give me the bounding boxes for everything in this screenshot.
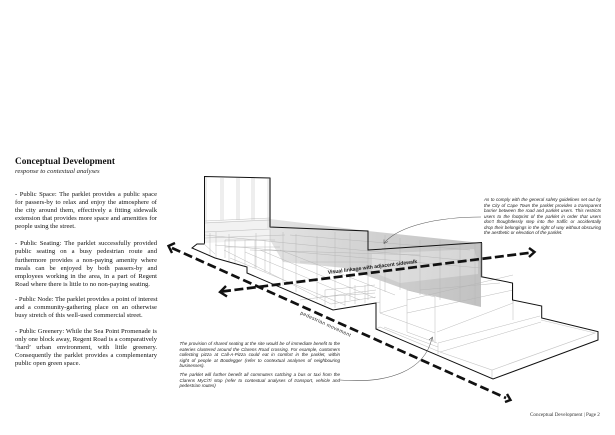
text: public node: and a community-gathering place on an otherwise <box>15 304 157 311</box>
text: public space: people using the street. <box>15 223 76 230</box>
text: public space: extension that provides more space and amenities for <box>15 215 157 222</box>
text: public node: busy stretch of this well-used commercial street. <box>15 312 143 319</box>
leader: safety note <box>384 217 481 244</box>
note: safety guidelines: barrier between the road and parklet users. This restricts <box>484 208 601 213</box>
text: public greenery: public open green space. <box>15 360 80 367</box>
thick dark wall edges <box>270 178 482 277</box>
note: shared seating: sight of people at Bootlegger (refer to contextual analyses of neighbouring <box>180 358 340 363</box>
note: safety guidelines: don’t thoughtlessly step into the traffic or accidentally <box>484 219 601 224</box>
note: commuters: The parklet will further benefit all commuters catching a bus or taxi from the <box>180 372 340 377</box>
wireframe lines <box>204 178 541 354</box>
text: public greenery <box>15 328 157 367</box>
text: public space <box>15 191 157 230</box>
note: shared seating: collecting pizza at Call-A-Pizza could eat in comfort in the parklet, within <box>180 352 340 357</box>
text: public space: the city around them, effectively a fitting sidewalk <box>15 207 157 214</box>
label: pedestrian movement: pedestrian movement <box>299 310 352 339</box>
note: shared seating <box>180 341 340 368</box>
text: public seating: meals can be enjoyed by both passers-by and <box>15 265 157 272</box>
note: safety guidelines <box>484 197 602 235</box>
arrow: pedestrian movement <box>168 243 510 402</box>
text: public space: for passers-by to relax and enjoy the atmosphere of <box>15 199 157 206</box>
note: safety guidelines: As to comply with the general safety guidelines set out by <box>484 197 601 202</box>
label: visual linkage: Visual linkage with adjacent sidewalk <box>328 259 418 276</box>
note: safety guidelines: the aesthetic or elevation of the parklet. <box>484 230 563 235</box>
note: shared seating: The provision of shared seating at the site would be of immediate benefit to the <box>180 341 340 346</box>
text: public seating: employees working in the area, in a part of Regent <box>15 273 157 280</box>
text: public seating: furthermore provides a non-paying amenity where <box>15 257 157 264</box>
note: safety guidelines: users to the footprint of the parklet in order that users <box>484 214 601 219</box>
note: shared seating: businesses). <box>180 363 205 368</box>
front platform surface <box>376 320 595 378</box>
grey back wall plane <box>205 219 481 307</box>
bold outline of parklet <box>192 176 598 379</box>
subtitle: response to contextual analyses <box>15 168 100 175</box>
footer: Conceptual Development | Page 2 <box>530 412 600 418</box>
note: safety guidelines: drop their belongings in the right of way without obscuring <box>484 225 601 230</box>
text: public greenery: ‘hard’ urban environment, with little greenery. <box>15 344 157 351</box>
title: Conceptual Development <box>15 156 115 166</box>
text: public seating: Road where there is little to no non-paying seating. <box>15 281 150 288</box>
text: public greenery: only one block away, Regent Road is a comparatively <box>15 336 157 343</box>
leader: shared seating note <box>340 337 433 381</box>
note: commuters <box>179 372 340 388</box>
note: commuters: pedestrian routes) <box>180 383 216 388</box>
text: public greenery: Consequently the parklet provides a complementary <box>15 352 157 359</box>
text: public greenery: - Public Greenery: While the Sea Point Promenade is <box>15 328 157 335</box>
text: public space: - Public Space: The parklet provides a public space <box>15 191 157 198</box>
note: commuters: Clarens MyCiTi stop (refer to contextual analyses of transport, vehicle and <box>180 378 340 383</box>
text: public seating <box>15 240 157 288</box>
arrow: visual linkage <box>220 248 534 296</box>
text: public node: - Public Node: The parklet provides a point of interest <box>15 296 158 303</box>
note: shared seating: eateries clustered around the Clarens Road crossing. For example, customers <box>180 347 340 352</box>
text: public seating: - Public Seating: The parklet successfully provided <box>15 240 157 247</box>
text: public node <box>15 296 158 319</box>
text: public seating: public seating on a busy pedestrian route and <box>15 248 157 255</box>
note: safety guidelines: the City of Cape Town the parklet provides a transparent <box>484 203 601 208</box>
